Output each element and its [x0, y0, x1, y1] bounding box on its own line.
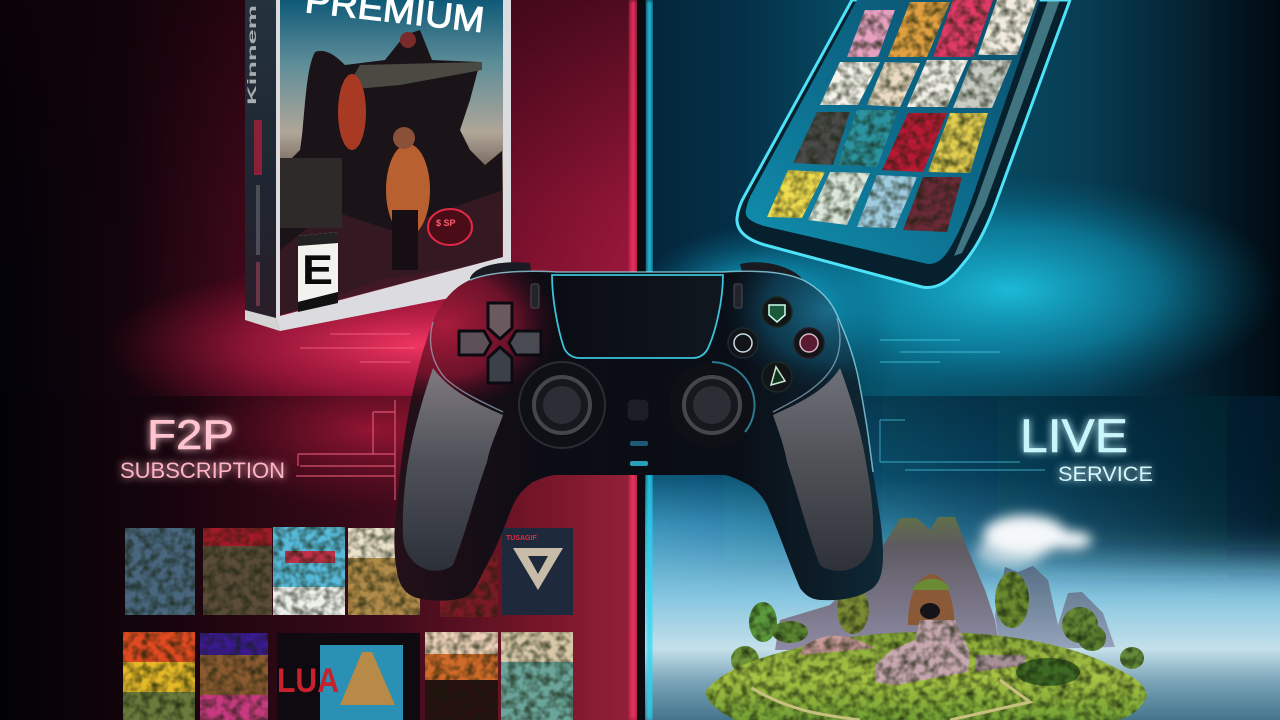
controller outline glow [470, 271, 873, 472]
island ground [705, 632, 1147, 720]
center button [627, 399, 649, 421]
poster: triangle emblem [502, 528, 573, 615]
status lights [630, 441, 648, 466]
neon circuit lines: right [860, 340, 1280, 470]
neon circuit lines: left [0, 334, 420, 500]
hill cave [908, 574, 955, 625]
poster: triangle emblem: TUSAGIF [506, 535, 537, 542]
box spine [245, 0, 280, 331]
poster: wide dark artwork: LUA [277, 662, 339, 700]
box cover: $ SP [436, 218, 456, 228]
poster: wide dark artwork [277, 633, 420, 720]
controller body [394, 271, 883, 601]
premium game box [245, 0, 511, 331]
touchpad [552, 275, 723, 358]
floating island world [705, 515, 1147, 720]
LIVE label: LIVE [1020, 409, 1128, 462]
subscription label: SUBSCRIPTION [120, 458, 285, 483]
smartphone with game library [737, 0, 1070, 288]
phone screen [746, 0, 1040, 264]
box spine: Kinnem [245, 5, 259, 105]
divider between panels [637, 0, 645, 720]
subscription game posters [123, 527, 573, 720]
d-pad [459, 303, 541, 383]
F2P label: F2P [147, 411, 234, 458]
face buttons [728, 297, 824, 392]
tree cluster [731, 572, 1144, 674]
game tiles [767, 0, 1037, 232]
service label: SERVICE [1058, 463, 1153, 486]
panel: blue right background [600, 0, 1280, 720]
right grip [773, 368, 873, 571]
mountains [775, 517, 1115, 650]
flower beds [800, 636, 1080, 686]
left grip [403, 368, 503, 571]
rating badge [298, 232, 338, 312]
rating badge: E [302, 246, 333, 293]
speaker slots [531, 284, 742, 308]
box cover [276, 0, 511, 331]
controller shoulder buttons [470, 262, 803, 280]
left thumbstick [519, 362, 605, 448]
game controller [394, 262, 883, 601]
right thumbstick [669, 362, 755, 448]
cloud [976, 515, 1092, 568]
grip edge highlights [431, 318, 840, 412]
flower mound [875, 620, 970, 685]
panel: red left background [0, 0, 637, 720]
